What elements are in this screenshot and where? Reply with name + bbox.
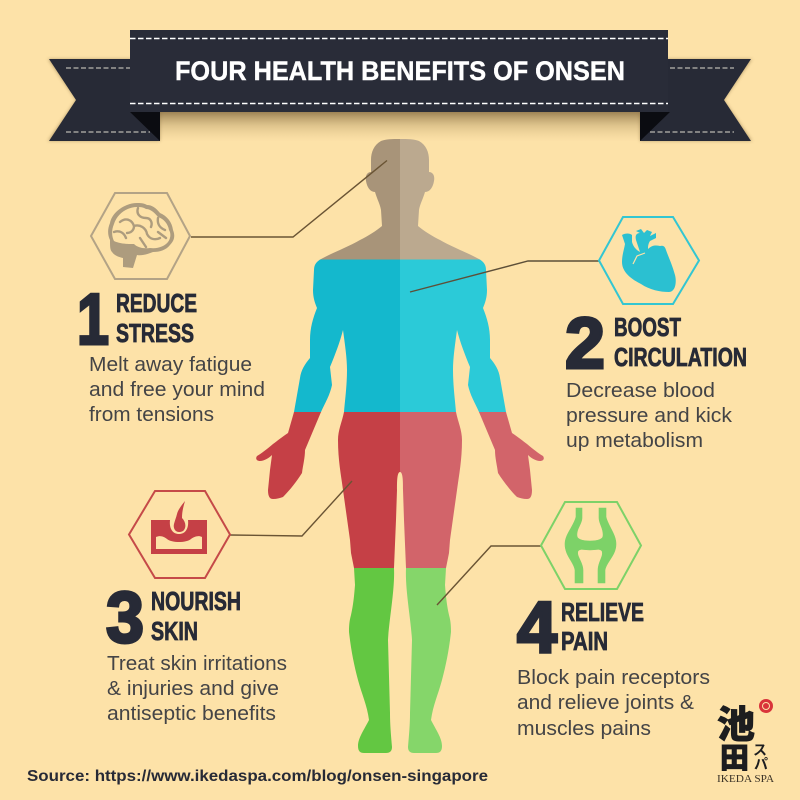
icon: heart [599, 217, 699, 304]
title banner [48, 30, 752, 142]
heading: RELIEVE [561, 597, 644, 627]
heading: NOURISH [151, 586, 241, 616]
text block: boost circulation: up metabolism [566, 430, 703, 452]
connector: stress [191, 160, 387, 237]
number 1: 1 [77, 280, 109, 360]
body: Decrease blood [566, 380, 715, 402]
text block: relieve pain [517, 588, 710, 740]
connector: pain [437, 546, 541, 605]
text block: reduce stress: STRESS [116, 318, 194, 348]
text block: reduce stress: and free your mind [89, 379, 265, 401]
heading: REDUCE [116, 288, 197, 318]
number 2: 2 [565, 304, 605, 384]
body: Melt away fatigue [89, 354, 252, 376]
logo: Ikeda Spa: パ [754, 754, 768, 774]
logo seal [759, 699, 773, 713]
body right half [400, 139, 544, 753]
number 3: 3 [106, 578, 144, 658]
text block: nourish skin [106, 578, 287, 725]
text block: boost circulation [565, 304, 747, 452]
text block: boost circulation: pressure and kick [566, 405, 733, 427]
text block: boost circulation: CIRCULATION [614, 342, 747, 372]
human body figure [256, 139, 544, 753]
body left half [256, 139, 400, 753]
text block: relieve pain: PAIN [561, 626, 608, 656]
logo: Ikeda Spa [717, 694, 775, 785]
logo: Ikeda Spa: ス [753, 740, 767, 760]
logo: Ikeda Spa: IKEDA SPA [717, 774, 775, 785]
text block: nourish skin: & injuries and give [107, 678, 279, 700]
icon: joint [541, 502, 641, 589]
heading: BOOST [614, 312, 681, 342]
icon: brain [91, 193, 190, 279]
connector: circulation [410, 261, 599, 292]
logo: Ikeda Spa: 池 [717, 694, 755, 749]
text block: relieve pain: and relieve joints & [517, 692, 695, 714]
text block: reduce stress: from tensions [89, 404, 214, 426]
body: Block pain receptors [517, 667, 710, 689]
connector: skin [230, 481, 352, 536]
number 4: 4 [517, 588, 557, 668]
body: Treat skin irritations [107, 653, 287, 675]
icon: skin [129, 491, 230, 578]
text block: reduce stress [77, 280, 265, 426]
source line: Source: https://www.ikedaspa.com/blog/onsen-singapore [27, 768, 488, 785]
logo: Ikeda Spa: 田 [720, 735, 749, 777]
title text: FOUR HEALTH BENEFITS OF ONSEN [175, 56, 625, 86]
text block: nourish skin: SKIN [151, 616, 198, 646]
text block: relieve pain: muscles pains [517, 718, 651, 740]
text block: nourish skin: antiseptic benefits [107, 703, 276, 725]
